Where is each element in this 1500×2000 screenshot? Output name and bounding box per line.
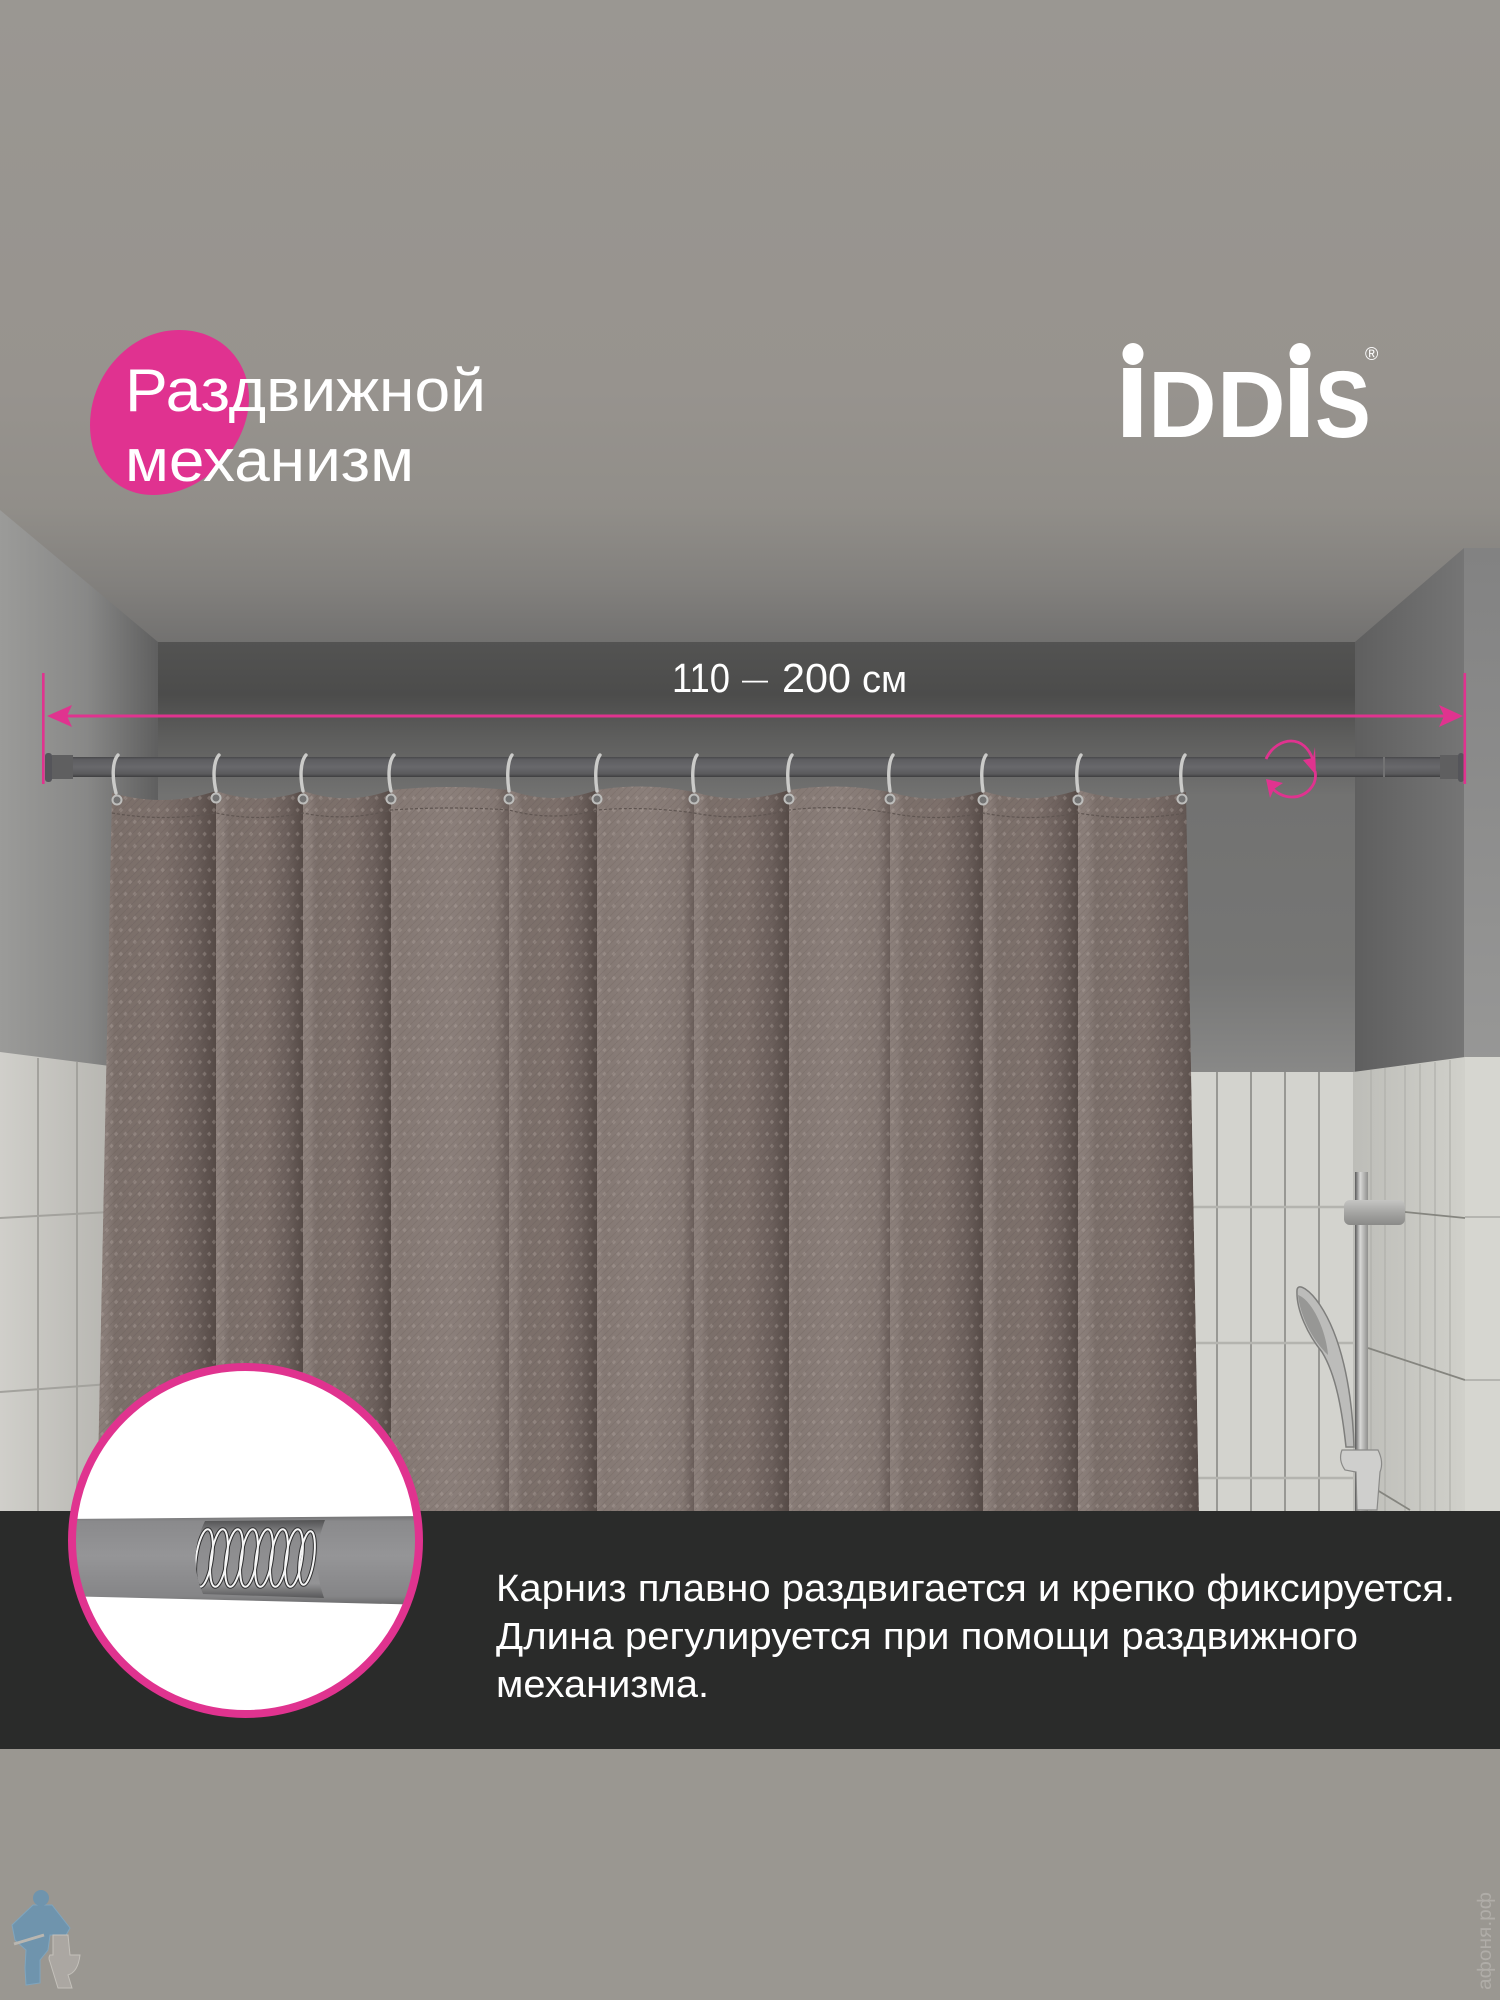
title: механизм: [125, 427, 414, 494]
logo: iDDiS: i: [1281, 318, 1317, 465]
hose holder: [1341, 1450, 1382, 1510]
right wall: [1355, 548, 1464, 1076]
left arrowhead: [47, 705, 72, 727]
ceiling background: [0, 0, 1500, 650]
watermark: site name: афоня.рф: [1475, 1892, 1496, 1990]
top hem stitching: [112, 808, 1186, 818]
logo: iDDiS: D: [1148, 352, 1217, 458]
back wall: [158, 642, 1355, 1082]
dimension label: [672, 655, 907, 701]
tiles: left wall: [0, 1052, 110, 1511]
tube: [60, 1516, 430, 1605]
dimension label: —: [742, 664, 768, 694]
wrench: [14, 1935, 44, 1944]
watermark: plumber figure: [12, 1890, 80, 1988]
curtain rings: [112, 755, 1186, 804]
description text: Карниз плавно раздвигается и крепко фиксируется.: [496, 1568, 1455, 1610]
dark caption band: [0, 1511, 1500, 1749]
curtain dotted pattern: [90, 780, 1210, 1515]
plumber head: [33, 1890, 49, 1906]
room: walls and tiles: [0, 510, 1500, 1511]
arrow shaft: [60, 714, 1450, 718]
title: Раздвижной: [125, 357, 486, 424]
right end tick: [1464, 673, 1466, 784]
dimension label: см: [862, 659, 907, 701]
plumber body: [12, 1905, 70, 1985]
hand shower: [1297, 1287, 1354, 1447]
description text: [496, 1568, 1455, 1706]
logo: iDDiS: [1122, 343, 1378, 438]
pink blob: [90, 330, 249, 495]
title: [125, 357, 486, 494]
logo: iDDiS: S: [1315, 351, 1371, 457]
toilet: [49, 1935, 80, 1988]
cut-out with spring: [196, 1520, 325, 1598]
curtain panels: [97, 780, 1199, 1515]
shower set: [1297, 1172, 1405, 1512]
tiles: right column: [1465, 1057, 1500, 1511]
dimension arrow: 110–200 cm: [42, 673, 1466, 784]
description text: Длина регулируется при помощи раздвижного: [496, 1616, 1358, 1658]
left end tick: [42, 673, 45, 784]
icon: rotation arrows: [1266, 741, 1316, 798]
right arrowhead: [1439, 705, 1463, 727]
floor strip: [0, 1749, 1500, 2000]
description text: механизма.: [496, 1664, 709, 1706]
logo: iDDiS: ®: [1365, 344, 1378, 364]
circle fill: [72, 1367, 419, 1714]
dimension label: 200: [782, 655, 851, 701]
curtain: [90, 780, 1210, 1515]
telescopic rod: [45, 753, 1464, 782]
curtain hatch weave: [90, 780, 1210, 1515]
detail circle: spring mechanism: [60, 1367, 430, 1714]
tiles: back wall: [1186, 1072, 1354, 1511]
tiles: right wall: [1353, 1057, 1465, 1511]
logo: iDDiS: D: [1217, 352, 1286, 458]
left wall: [0, 510, 158, 1080]
rail bracket: [1344, 1200, 1405, 1225]
shower rail: [1355, 1172, 1368, 1512]
dimension label: 110: [672, 655, 730, 701]
right corner column: [1464, 548, 1500, 1063]
logo: iDDiS: i: [1114, 318, 1150, 465]
pink ring: [72, 1367, 419, 1714]
